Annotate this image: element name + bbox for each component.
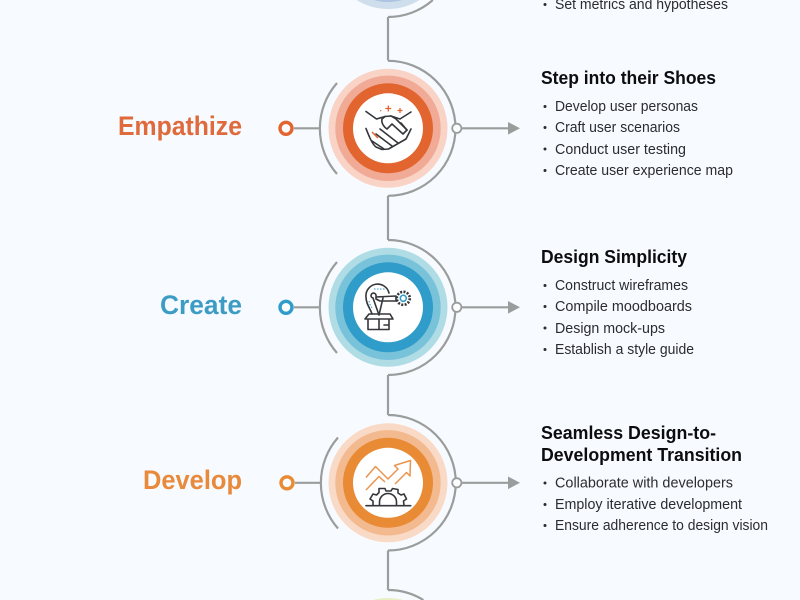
step: Empathize	[118, 61, 733, 240]
text block: Design Simplicity	[541, 247, 694, 358]
text block: Step into their Shoes	[541, 68, 733, 179]
text block: Step into their Shoes: Conduct user testing	[555, 142, 686, 158]
icon: handshake	[366, 106, 411, 150]
concentric circles	[328, 69, 448, 188]
marker ring	[280, 301, 292, 313]
text block: Step into their Shoes: Craft user scenarios	[555, 120, 680, 136]
label: Empathize: Empathize	[118, 111, 242, 141]
concentric circles	[328, 248, 448, 367]
icon: lightbulb, box and gear	[365, 284, 410, 330]
output node and arrow	[452, 122, 520, 135]
connector lines	[295, 415, 456, 590]
text block: Design Simplicity: Construct wireframes	[555, 278, 688, 294]
label: Develop: Develop	[143, 465, 242, 495]
step: Develop	[143, 415, 768, 590]
output node and arrow	[452, 476, 520, 489]
icon: growth arrow and gear	[366, 460, 411, 506]
text block: Design Simplicity: Design mock-ups	[555, 321, 665, 337]
connector lines	[294, 240, 455, 415]
text block: Design Simplicity: Establish a style guide	[555, 342, 694, 358]
marker ring	[281, 477, 293, 489]
concentric circles	[328, 423, 448, 542]
text block: Design Simplicity: Design Simplicity	[541, 247, 687, 267]
text block: Seamless Design-to-Development Transition: Collaborate with developers	[555, 476, 733, 492]
label: Create: Create	[160, 290, 242, 320]
text block: Seamless Design-to-Development Transition	[541, 423, 768, 534]
text block: Design Simplicity: Compile moodboards	[555, 299, 692, 315]
output node and arrow	[452, 301, 520, 314]
text block: Step into their Shoes: Develop user personas	[555, 99, 698, 115]
text block: Seamless Design-to-Development Transition: Development Transition	[541, 445, 742, 465]
text block: Seamless Design-to-Development Transition: Employ iterative development	[555, 497, 742, 513]
step: previous stage (cropped at top)	[356, 0, 728, 60]
step: Create	[160, 240, 694, 415]
marker ring	[280, 122, 292, 134]
connector lines	[294, 61, 455, 240]
text block: Step into their Shoes: Create user experience map	[555, 163, 733, 179]
text block: Seamless Design-to-Development Transition: Ensure adherence to design vision	[555, 518, 768, 534]
text block: Seamless Design-to-Development Transition: Seamless Design-to-	[541, 423, 716, 443]
text block: Step into their Shoes: Step into their Shoes	[541, 68, 716, 88]
step: next stage (cropped at bottom)	[373, 590, 423, 600]
